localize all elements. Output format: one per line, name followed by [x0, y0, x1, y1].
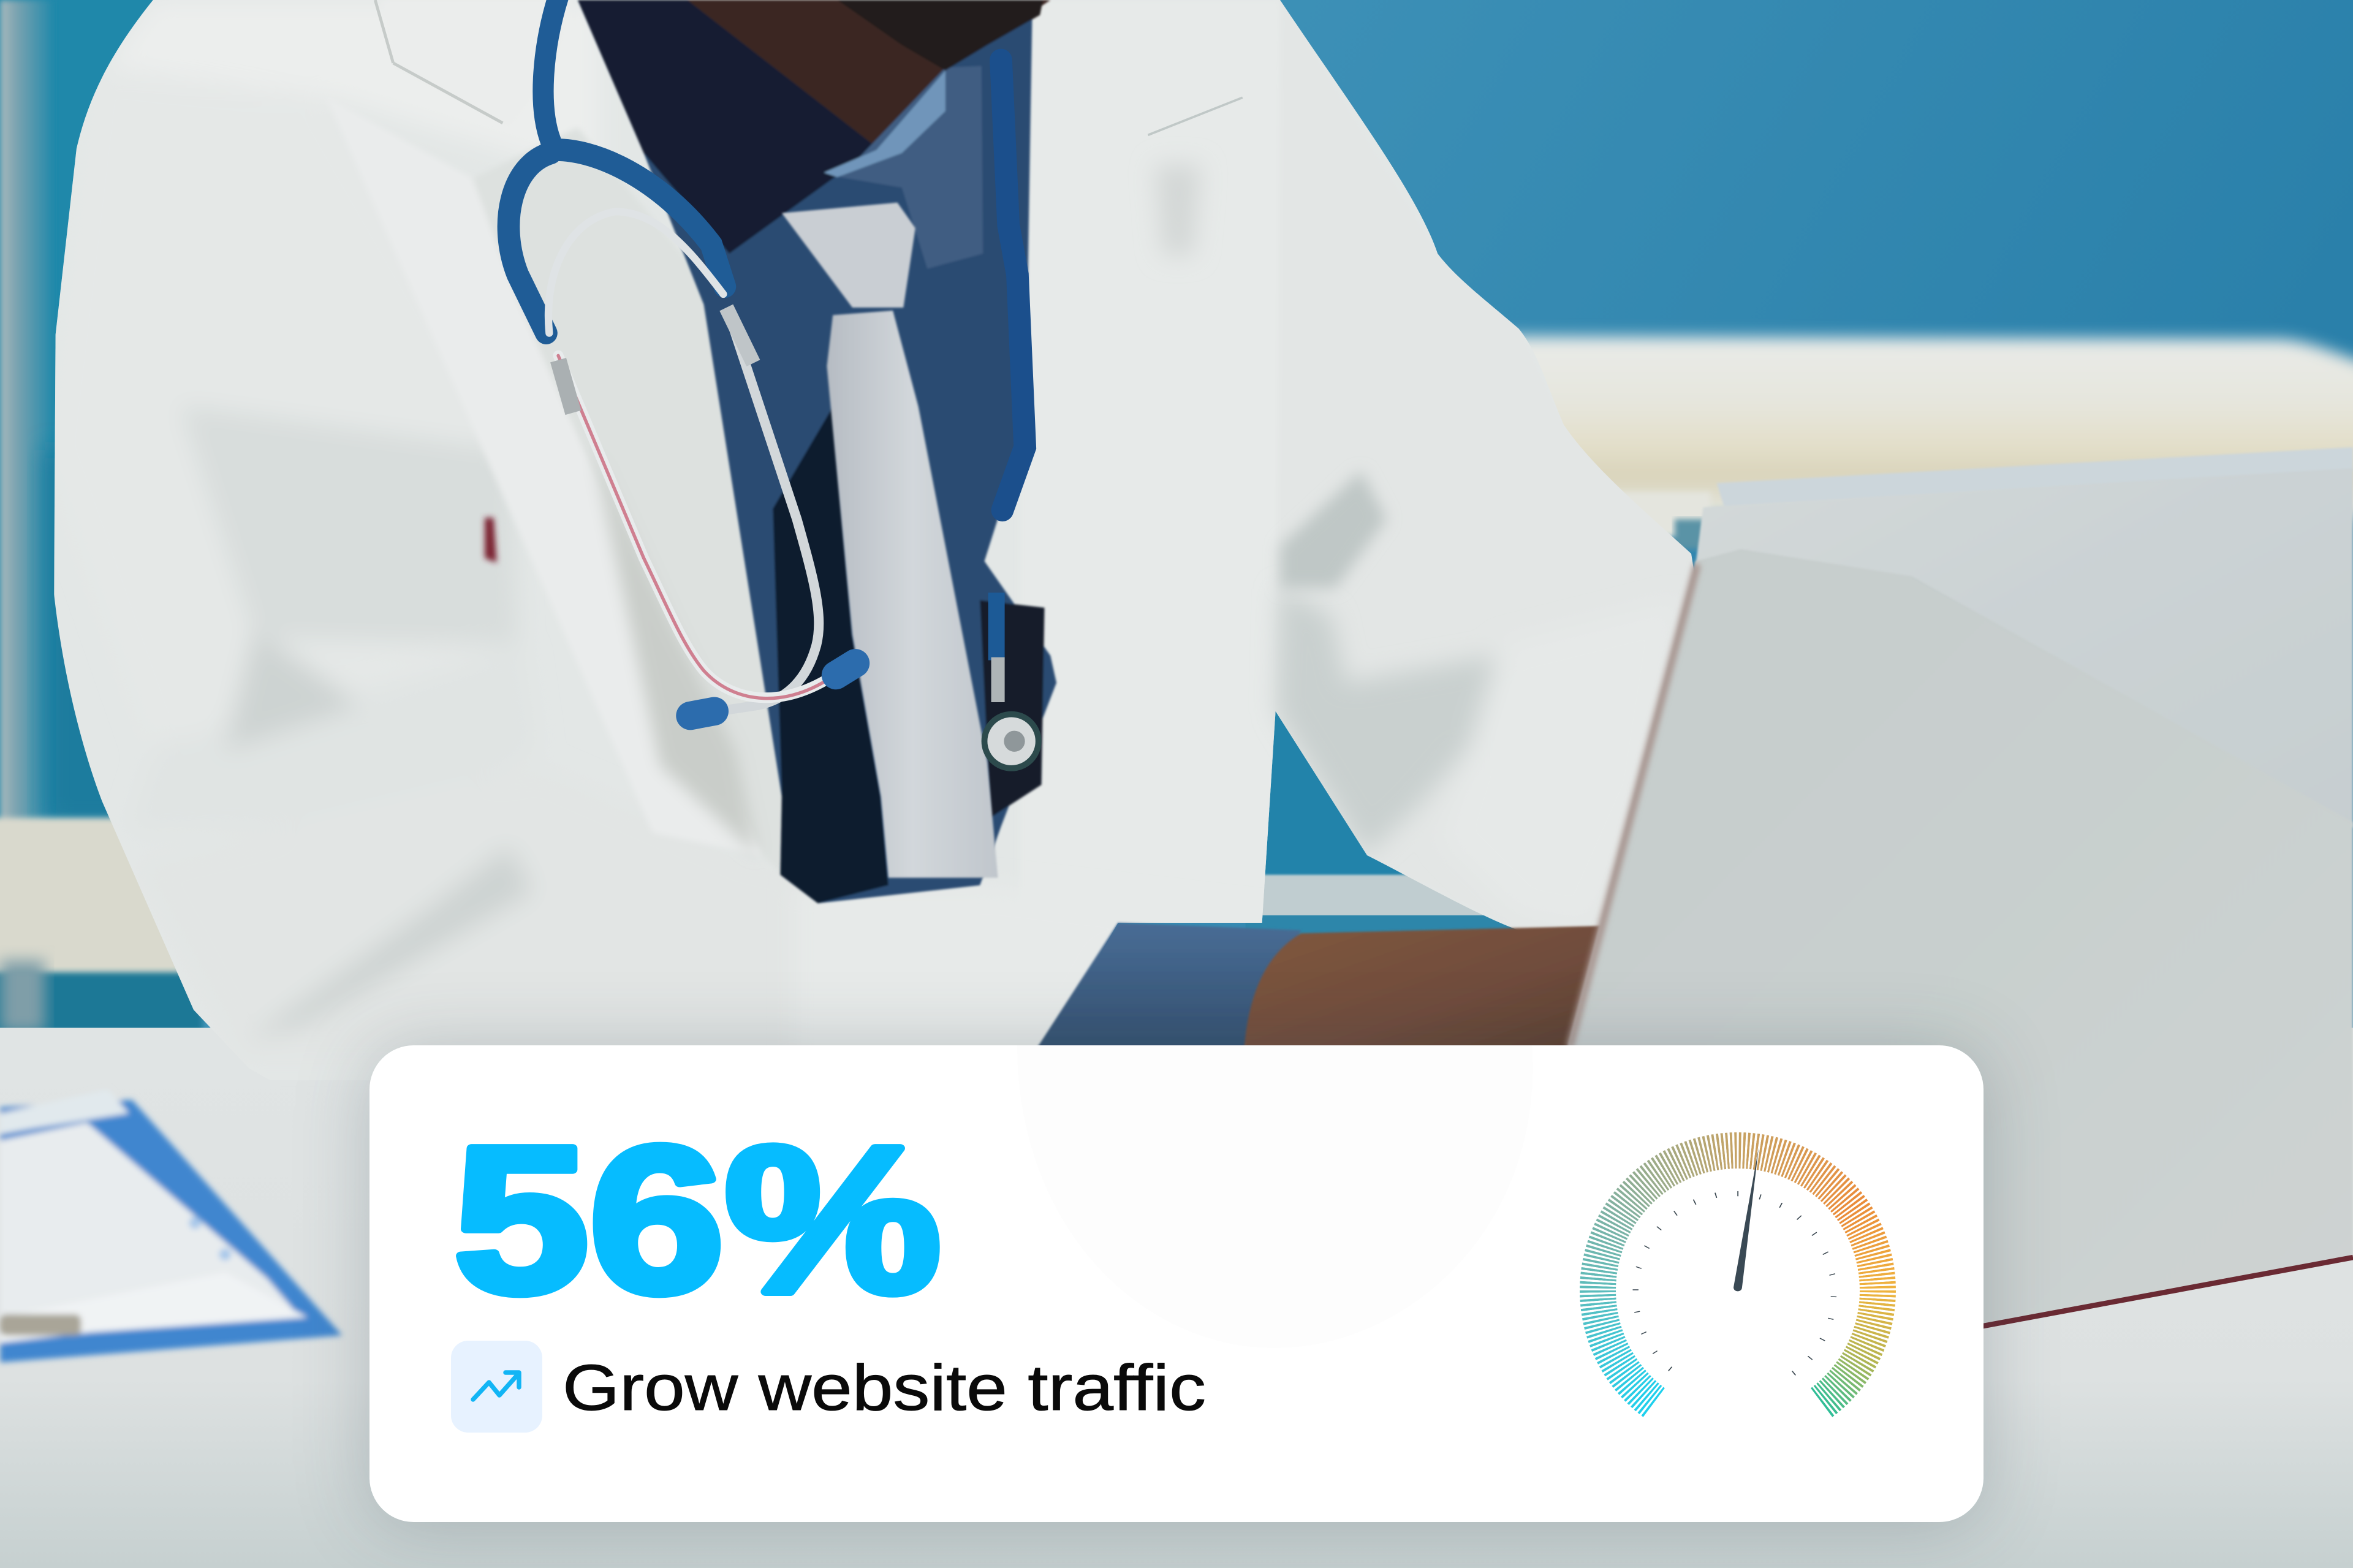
- shirt cuff: [1036, 923, 1301, 1050]
- desk surface: [0, 1028, 2353, 1568]
- hand on keyboard: [1244, 926, 1605, 1050]
- stat text and trend icon: [451, 1104, 1206, 1433]
- stethoscope: [509, 0, 1039, 768]
- gauge ring: gradient bars: [1580, 1132, 1896, 1449]
- coat shading: right panel and sleeve: [1116, 0, 1694, 928]
- neck shadow: [688, 0, 1050, 147]
- tie: [782, 203, 998, 878]
- icon: trending up: [451, 1341, 542, 1433]
- blue wall and blurred room background: [0, 0, 2353, 1050]
- laptop: [1567, 447, 2353, 1330]
- lab coat: [54, 0, 1694, 1036]
- blue folder with papers: [0, 1089, 342, 1363]
- value: 56%: 56%: [453, 1104, 941, 1336]
- coat shading: left sleeve and chest: [55, 0, 585, 1031]
- beard: [838, 0, 1043, 70]
- label: Grow website traffic: Grow website traffic: [563, 1352, 1206, 1424]
- stat card: [369, 1045, 1984, 1522]
- shirt collar: [578, 0, 876, 254]
- shirt and neck: [578, 0, 1056, 903]
- gauge: [1580, 1132, 1896, 1417]
- tick marks: [1633, 1192, 1836, 1375]
- faint card highlight: [1017, 1045, 1533, 1348]
- gauge dial: ticks and needle: [1632, 1148, 1837, 1376]
- needle: [1733, 1148, 1759, 1291]
